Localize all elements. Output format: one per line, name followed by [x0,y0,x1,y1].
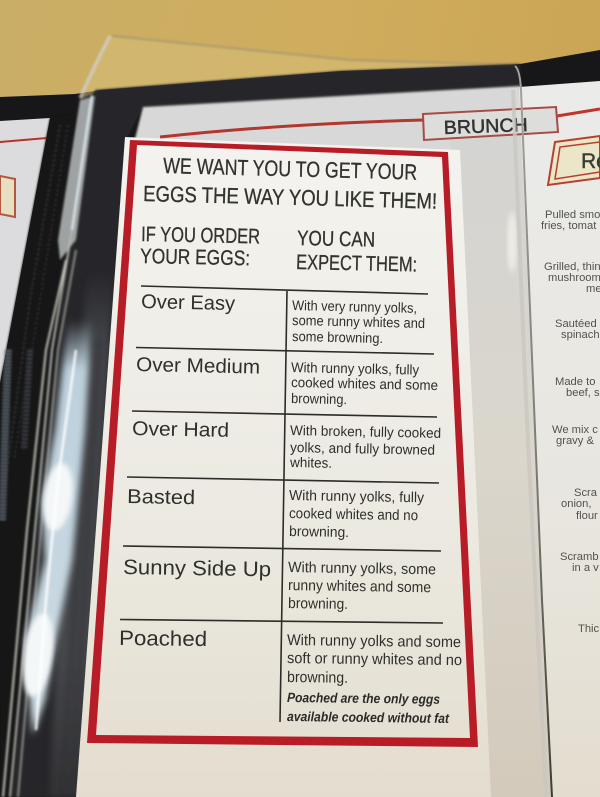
right page menu descriptions: fries, tomat [541,220,597,232]
headline: EGGS THE WAY YOU LIKE THEM! [143,181,437,214]
column heading: if you order your eggs: IF YOU ORDER [141,223,260,248]
column heading: you can expect them: EXPECT THEM: [296,251,417,277]
brunch section tab [160,107,558,140]
headline [143,153,437,214]
row: over easy: With very runny yolks, [292,297,417,316]
row: over hard [132,418,441,471]
column heading: if you order your eggs [140,223,260,270]
row: over easy: Over Easy [141,291,235,315]
poached note: Poached are the only eggs [287,690,441,707]
row: sunny side up: Sunny Side Up [123,556,271,581]
right page menu descriptions: mushroom [548,272,600,284]
row: poached: Poached [119,627,207,651]
row: basted [127,486,425,541]
right page menu descriptions: Pulled smo [545,209,600,221]
row: poached: browning. [287,669,348,687]
right page menu descriptions: onion, [561,498,591,510]
right page menu descriptions: spinach [561,329,600,341]
right page menu descriptions: flour [576,510,598,522]
row: basted: Basted [127,486,195,509]
row: over medium [136,354,438,407]
row: over medium: browning. [291,390,347,407]
poached note [287,690,450,726]
row: poached [119,627,462,726]
right page menu descriptions: We mix c [552,424,598,436]
left page red box [0,176,15,217]
sleeve right edge [513,66,552,797]
row: over easy [141,291,425,346]
white paper insert [76,137,491,797]
left binder stitched spine [0,114,75,797]
row: over hard: Over Hard [132,418,229,442]
right page menu descriptions: Made to [555,376,595,388]
egg table rules [120,286,443,722]
row: over hard: yolks, and fully browned [290,439,435,458]
sleeve glare highlights [18,320,92,735]
plastic sleeve corner over table [80,35,520,100]
right page menu descriptions: Grilled, thin [544,261,600,273]
poached note: available cooked without fat [287,709,450,726]
row: sunny side up: browning. [288,595,348,613]
row: sunny side up [123,556,436,613]
row: over medium: Over Medium [136,354,260,379]
right page menu descriptions: beef, s [566,387,600,399]
column heading: you can expect them: YOU CAN [297,227,375,252]
central menu page behind card [100,86,551,797]
row: sunny side up: With runny yolks, some [288,559,436,578]
row: poached: soft or runny whites and no [287,650,462,669]
left menu page [0,118,50,383]
brunch section tab: BRUNCH [443,115,528,139]
right menu page [519,81,600,797]
row: over easy: some runny whites and [292,312,425,331]
row: poached: With runny yolks and some [287,632,461,651]
right page menu descriptions: in a v [572,562,599,574]
grey streaked reflection [50,270,114,797]
column heading: you can expect them [296,227,417,277]
right page menu descriptions: Thic [578,623,600,635]
right page menu descriptions: gravy & [556,435,594,447]
right page menu descriptions: Scra [574,487,598,499]
row: basted: browning. [289,524,349,541]
red card border [87,140,478,747]
row: over hard: whites. [289,454,332,471]
column heading: if you order your eggs: YOUR EGGS: [140,245,250,270]
row: over medium: cooked whites and some [291,374,438,393]
row: over easy: some browning. [292,328,383,346]
headline: WE WANT YOU TO GET YOUR [163,153,417,185]
right page menu descriptions [541,209,600,635]
row: sunny side up: runny whites and some [288,577,431,596]
right page red heading box [548,136,600,185]
row: basted: cooked whites and no [289,506,418,524]
central dark binder strip [12,64,520,797]
sleeve plastic edge strip and light lines [3,95,95,797]
row: basted: With runny yolks, fully [289,488,425,506]
row: over medium: With runny yolks, fully [291,359,419,378]
right page menu descriptions: Scramb [560,551,599,563]
row: over hard: With broken, fully cooked [290,422,441,441]
right page menu descriptions: Sautéed [555,318,597,330]
